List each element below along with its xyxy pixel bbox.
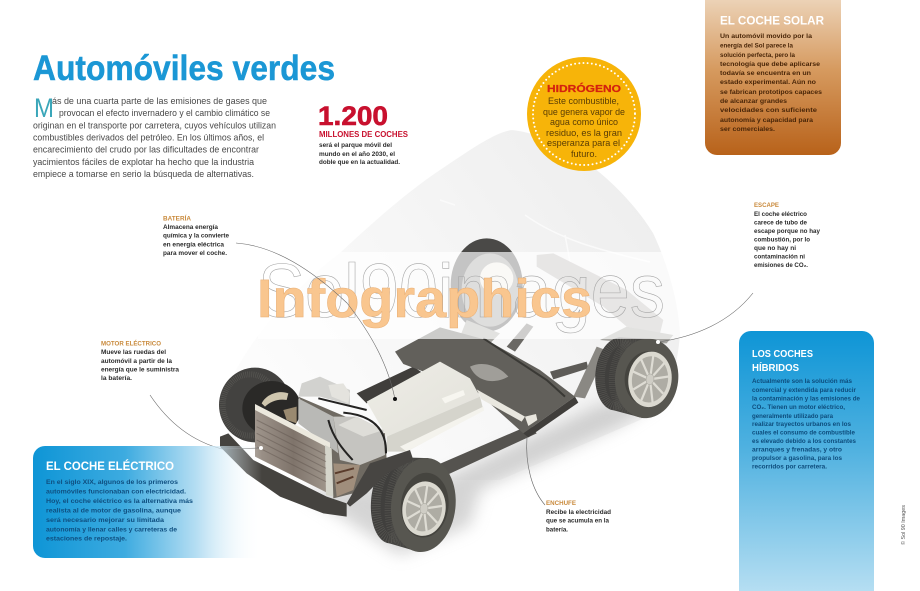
panel: los coches híbridos: la contaminación y las emisiones de <box>752 395 860 402</box>
panel: el coche eléctrico: EL COCHE ELÉCTRICO <box>46 458 174 473</box>
panel: el coche solar: tecnología que debe aplicarse <box>720 61 820 68</box>
panel: el coche eléctrico: Hoy, el coche eléctrico es la alternativa más <box>46 498 193 505</box>
panel: los coches híbridos: arranques y frenadas, y otro <box>752 447 842 454</box>
label: escape: carece de tubo de <box>754 220 807 227</box>
panel: hidrógeno: residuo, es la gran <box>546 128 622 138</box>
radiator <box>255 404 333 497</box>
statistic: 1.200 millones de coches: MILLONES DE COCHES <box>319 130 409 139</box>
label: escape: combustión, por lo <box>754 237 810 244</box>
panel: los coches híbridos: comercial y extendida para reducir <box>752 387 856 394</box>
panel: el coche solar: solución perfecta, pero la <box>720 52 795 59</box>
panel: el coche eléctrico: autonomía y llenar calles y carreteras de <box>46 526 177 533</box>
panel: los coches híbridos: realizar trayectos urbanos en los <box>752 421 851 428</box>
statistic: 1.200 millones de coches: será el parque móvil del <box>319 142 392 149</box>
label: enchufe: que se acumula en la <box>546 518 609 525</box>
panel: el coche solar: todavía se encuentra en un <box>720 70 811 77</box>
panel: los coches híbridos: Actualmente son la solución más <box>752 378 852 385</box>
statistic: 1.200 millones de coches: doble que en la actualidad. <box>319 159 400 166</box>
label: escape: El coche eléctrico <box>754 211 807 218</box>
floor platform <box>395 327 578 437</box>
panel: el coche solar: autonomía y capacidad para <box>720 117 813 124</box>
car chassis illustration <box>219 238 682 555</box>
label: motor eléctrico: automóvil a partir de la <box>101 358 172 365</box>
intro text <box>33 93 276 179</box>
panel: el coche eléctrico: será necesario mejorar su limitada <box>46 517 164 524</box>
panel: el coche solar: Un automóvil movido por la <box>720 33 812 40</box>
rear left wheel <box>451 238 523 332</box>
panel: los coches híbridos: recorridos por carretera. <box>752 464 827 471</box>
panel: los coches híbridos: LOS COCHES <box>752 348 813 360</box>
panel: el coche eléctrico: automóviles funcionaban con electricidad. <box>46 488 186 495</box>
rear suspension <box>537 253 663 333</box>
leader dot: motor <box>259 446 263 450</box>
intro text: empiece a tomarse en serio la búsqueda de alternativas. <box>33 169 254 179</box>
panel: el coche eléctrico: realista al de motor de gasolina, aunque <box>46 508 181 515</box>
rear right wheel <box>591 333 682 421</box>
statistic: 1.200 millones de coches: mundo en el año 2030, el <box>319 151 395 158</box>
label: escape <box>754 203 820 269</box>
label: batería: química y la convierte <box>163 233 229 240</box>
label: batería: Almacena energía <box>163 224 218 231</box>
panel: el coche eléctrico <box>33 446 262 558</box>
front right wheel <box>366 453 460 555</box>
intro text: combustibles derivados del petróleo. En los últimos años, el <box>33 133 264 143</box>
panel: hidrógeno: que genera vapor de <box>543 107 625 117</box>
label: escape: emisiones de CO₂. <box>754 262 808 269</box>
battery pack <box>367 362 484 452</box>
panel: el coche solar: EL COCHE SOLAR <box>720 16 825 28</box>
title: Automóviles verdes <box>33 49 335 88</box>
intro text: ás de una cuarta parte de las emisiones de gases que <box>52 96 267 106</box>
watermark: Infographics: Infographics <box>257 269 592 329</box>
panel: los coches híbridos <box>739 331 874 591</box>
panel: hidrógeno: agua como único <box>550 117 618 127</box>
panel: el coche solar: ser comerciales. <box>720 126 775 133</box>
label: motor eléctrico: energía que le suministra <box>101 367 179 374</box>
leader line: enchufe <box>527 437 545 505</box>
leader dot: batería <box>393 397 397 401</box>
label: escape: escape porque no hay <box>754 228 820 235</box>
panel: hidrógeno: esperanza para el <box>547 138 620 148</box>
label: motor eléctrico: la batería. <box>101 375 132 382</box>
panel: hidrógeno: futuro. <box>571 149 597 159</box>
leader line: motor <box>150 395 261 449</box>
intro text: provocan el efecto invernadero y el cambio climático se <box>59 108 270 118</box>
front bumper <box>220 433 347 517</box>
panel: hidrógeno <box>527 57 641 171</box>
watermark band <box>258 252 683 339</box>
intro text: originan en el transporte por carretera, cuyos vehículos utilizan <box>33 120 276 130</box>
label: enchufe: Recibe la electricidad <box>546 509 611 516</box>
front left wheel <box>219 368 301 442</box>
leader line: escape <box>658 293 753 342</box>
label: escape: ESCAPE <box>754 203 779 209</box>
label: enchufe <box>546 501 611 533</box>
charging rail <box>477 389 525 422</box>
side rails <box>357 367 423 403</box>
label: motor eléctrico: Mueve las ruedas del <box>101 349 166 356</box>
panel: los coches híbridos: HÍBRIDOS <box>752 361 799 374</box>
label: motor eléctrico <box>101 340 179 382</box>
panel: el coche solar <box>705 0 841 155</box>
label: enchufe: batería. <box>546 526 568 533</box>
credit: © Sol 90 Images <box>900 505 907 545</box>
label: batería: en energía eléctrica <box>163 241 224 248</box>
statistic: 1.200 millones de coches: 1.200 <box>318 101 388 131</box>
intro text: encarecimiento del crudo por las dificultades de encontrar <box>33 145 259 155</box>
car body ghost <box>222 130 680 480</box>
panel: los coches híbridos: es elevado debido a los constantes <box>752 438 856 445</box>
label: escape: contaminación ni <box>754 254 805 261</box>
panel: el coche solar: de alcanzar grandes <box>720 98 787 105</box>
panel: el coche eléctrico: En el siglo XIX, algunos de los primeros <box>46 479 178 486</box>
panel: el coche solar: velocidades con suficiente <box>720 107 817 114</box>
leader dot: escape <box>656 340 660 344</box>
panel: el coche solar: energía del Sol parece la <box>720 43 793 50</box>
panel: los coches híbridos: cuales el consumo de combustible <box>752 429 855 436</box>
label: batería: para mover el coche. <box>163 250 227 257</box>
ground shadow <box>300 395 665 555</box>
panel: el coche eléctrico: estaciones de repostaje. <box>46 536 127 543</box>
label: escape: que no hay ni <box>754 245 796 252</box>
intro text: yacimientos fáciles de explotar ha hecho que la industria <box>33 157 255 167</box>
panel: los coches híbridos: propulsor a gasolina, para los <box>752 455 842 462</box>
label: batería: BATERÍA <box>163 215 192 223</box>
panel: hidrógeno: Este combustible, <box>548 96 619 106</box>
panel: hidrógeno: HIDRÓGENO <box>547 82 621 95</box>
label: enchufe: ENCHUFE <box>546 501 576 507</box>
panel: el coche solar: se fabrican prototipos capaces <box>720 89 822 96</box>
label: batería <box>163 215 229 257</box>
statistic: 1.200 millones de coches <box>318 101 409 166</box>
panel: los coches híbridos: CO₂. Tienen un motor eléctrico, <box>752 404 845 411</box>
electric motor <box>298 377 387 498</box>
watermark: Sol90images: Sol90images <box>258 249 665 334</box>
drop cap: M <box>34 93 54 123</box>
panel: el coche solar: estado experimental. Aún no <box>720 79 816 86</box>
charging plug <box>525 414 537 426</box>
leader line: batería <box>236 243 395 399</box>
chassis front frame <box>347 450 413 507</box>
label: motor eléctrico: MOTOR ELÉCTRICO <box>101 340 161 348</box>
panel: los coches híbridos: generalmente utilizado para <box>752 413 833 420</box>
